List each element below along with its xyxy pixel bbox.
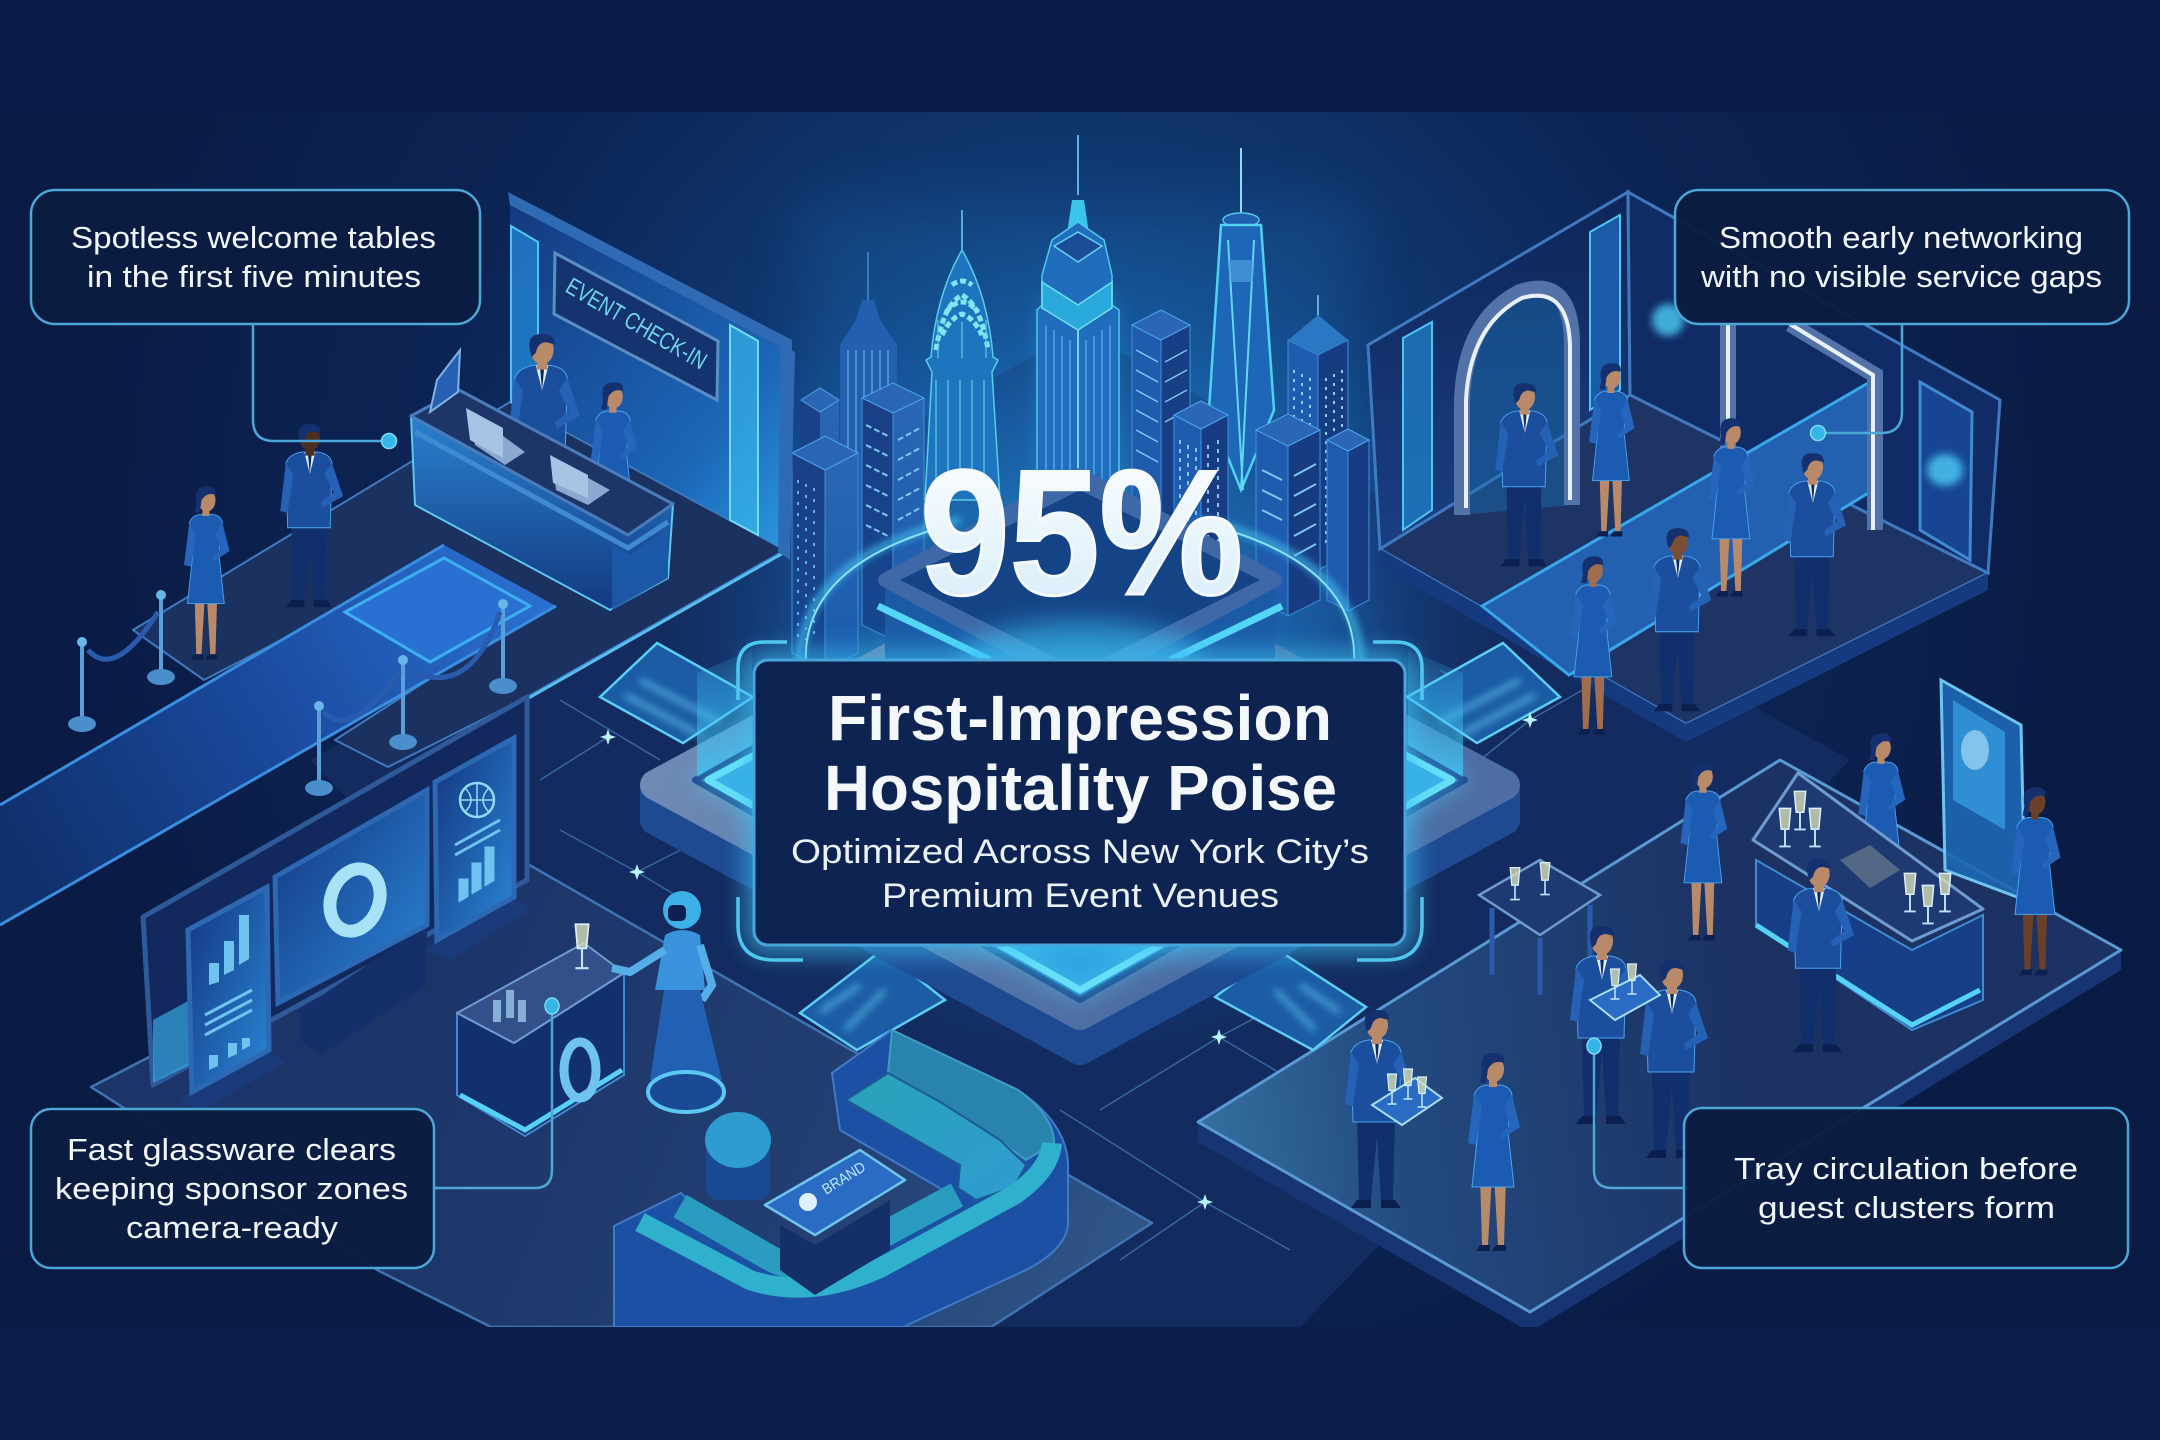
building block 7 [1256, 414, 1320, 616]
carpet [1482, 382, 1870, 675]
building block 6 [1288, 295, 1348, 570]
back panel [143, 697, 527, 1085]
bottom band [0, 1327, 2160, 1440]
building block 5 [1174, 401, 1228, 579]
building: One WTC [1209, 148, 1274, 490]
callout text line 2: with no visible service gaps [1700, 259, 2102, 294]
sign [554, 253, 718, 400]
guest near waiter [1640, 960, 1708, 1158]
connector dot [545, 998, 559, 1014]
callout: tray circulation [1587, 1038, 2128, 1268]
center glow [650, 210, 1510, 1070]
callout text line 1: Fast glassware clears [67, 1132, 396, 1167]
callout text line 2: guest clusters form [1758, 1190, 2055, 1225]
panel: check-in area [0, 192, 795, 925]
wall light right [730, 325, 758, 535]
connector [253, 325, 389, 441]
sofa backrest [888, 1030, 1054, 1160]
waiter with tray [1570, 926, 1638, 1124]
upper block [885, 485, 1275, 700]
screen: main logo [275, 790, 427, 1055]
connector dot [382, 434, 396, 448]
sofa base [614, 1030, 1068, 1327]
robot [612, 891, 724, 1112]
connector [1818, 324, 1902, 433]
woman guest front [1468, 1053, 1520, 1251]
callout text line 1: Smooth early networking [1719, 220, 2083, 255]
info screen [1941, 680, 2025, 900]
skyline [792, 135, 1369, 680]
platform edge [527, 552, 785, 699]
glass pane left [697, 650, 752, 777]
floor [133, 402, 785, 767]
desk woman [590, 382, 637, 560]
guest at bar [1788, 859, 1854, 1052]
arch 1 [1462, 289, 1572, 515]
guest: woman center [1708, 418, 1755, 596]
building block 1 [862, 383, 924, 640]
left wall [1368, 192, 1630, 549]
back wall [510, 205, 790, 550]
callout text line 3: camera-ready [126, 1210, 339, 1245]
central pedestal [655, 475, 1505, 1050]
screen: bar chart [180, 887, 285, 1112]
title line 1: First-Impression [828, 682, 1332, 754]
desk man [508, 334, 580, 542]
outer brackets [738, 642, 1422, 960]
wall light 2 [1590, 215, 1620, 410]
guest: man front [1648, 528, 1711, 711]
connector dot [1810, 426, 1826, 440]
big statistic 95%: 95% [920, 433, 1243, 632]
wall door [1920, 382, 1972, 560]
bartender woman [1858, 733, 1905, 911]
callout box [1684, 1108, 2128, 1268]
lounge sofa [614, 1030, 1068, 1327]
lower platform side [655, 790, 1505, 1050]
stars [600, 712, 1538, 1210]
cyan panel light [153, 1000, 190, 1083]
glow arcs [799, 520, 1361, 680]
sofa top strip [640, 1143, 1052, 1288]
wall light left [511, 226, 538, 420]
host woman [184, 486, 230, 660]
wall light [1403, 322, 1432, 530]
buffet bar [1753, 680, 2025, 1030]
sofa seats [846, 1073, 1026, 1200]
panel: lower-left sponsor zone platform [91, 863, 1152, 1327]
callout box [31, 1109, 434, 1268]
arch 2 [1728, 324, 1875, 530]
table brand text: BRAND [819, 1158, 869, 1198]
guest: woman at arch [1589, 363, 1634, 536]
stool [705, 1112, 771, 1200]
panel glow [745, 650, 1415, 955]
hostess with plate [2011, 787, 2061, 975]
connector strip lower-left [800, 950, 945, 1050]
desk [411, 350, 673, 610]
callout: glassware clears [31, 998, 559, 1268]
callout text line 1: Tray circulation before [1734, 1151, 2078, 1186]
sign text: EVENT CHECK-IN [561, 273, 711, 375]
desk sign [430, 350, 460, 412]
lower platform top [655, 555, 1505, 1015]
connector [1594, 1046, 1684, 1188]
callout text line 2: in the first five minutes [87, 259, 421, 294]
glass pane right [1408, 650, 1463, 777]
brand coffee table [765, 1150, 905, 1295]
callout: early networking [1675, 190, 2129, 440]
building block 4 [1132, 310, 1190, 540]
connector dot [1587, 1038, 1601, 1054]
building block 8 [1327, 429, 1369, 611]
glass station [457, 924, 624, 1136]
panel: lower-right catering platform [1198, 760, 2121, 1332]
center title panel [738, 642, 1422, 960]
callout text line 1: Spotless welcome tables [71, 220, 436, 255]
callout: welcome tables [31, 190, 480, 448]
connector strip lower-right [1215, 950, 1366, 1050]
panel: networking room [1368, 192, 2000, 742]
desk laptops [470, 412, 525, 465]
server woman with tray [1680, 762, 1727, 940]
floor [1380, 395, 1988, 724]
guest: man at arch [1495, 383, 1558, 566]
subtitle line 1: Optimized Across New York City’s [791, 833, 1369, 871]
blue carpet [0, 545, 556, 925]
right wall [1628, 192, 2000, 573]
connector [434, 1006, 552, 1188]
central floor [310, 330, 1850, 1327]
building: Empire State [1025, 135, 1132, 520]
building: left tower [840, 252, 897, 560]
waiter tray [1372, 1069, 1442, 1125]
second waiter tray [1590, 964, 1660, 1020]
screen: globe [425, 738, 530, 960]
subtitle line 2: Premium Event Venues [882, 877, 1279, 915]
energy connectors [600, 643, 1560, 1050]
title line 2: Hospitality Poise [824, 752, 1337, 824]
building block 3 [792, 436, 858, 670]
connector strip upper-left [600, 643, 753, 743]
building: Chrysler [925, 210, 1000, 500]
building block 2 [801, 388, 839, 572]
guest: woman front [1570, 556, 1617, 734]
host man with menu [280, 424, 343, 607]
guest: man right [1783, 453, 1846, 636]
waiter front [1345, 1010, 1413, 1208]
side table [1479, 860, 1600, 995]
callout text line 2: keeping sponsor zones [55, 1171, 408, 1206]
panel: sponsor screens [143, 697, 530, 1112]
sofa front seats [680, 1195, 957, 1266]
connector strip upper-right [1407, 643, 1560, 743]
stanchions [68, 590, 517, 796]
callout box [31, 190, 480, 324]
callout box [1675, 190, 2129, 324]
panel box [754, 660, 1405, 945]
